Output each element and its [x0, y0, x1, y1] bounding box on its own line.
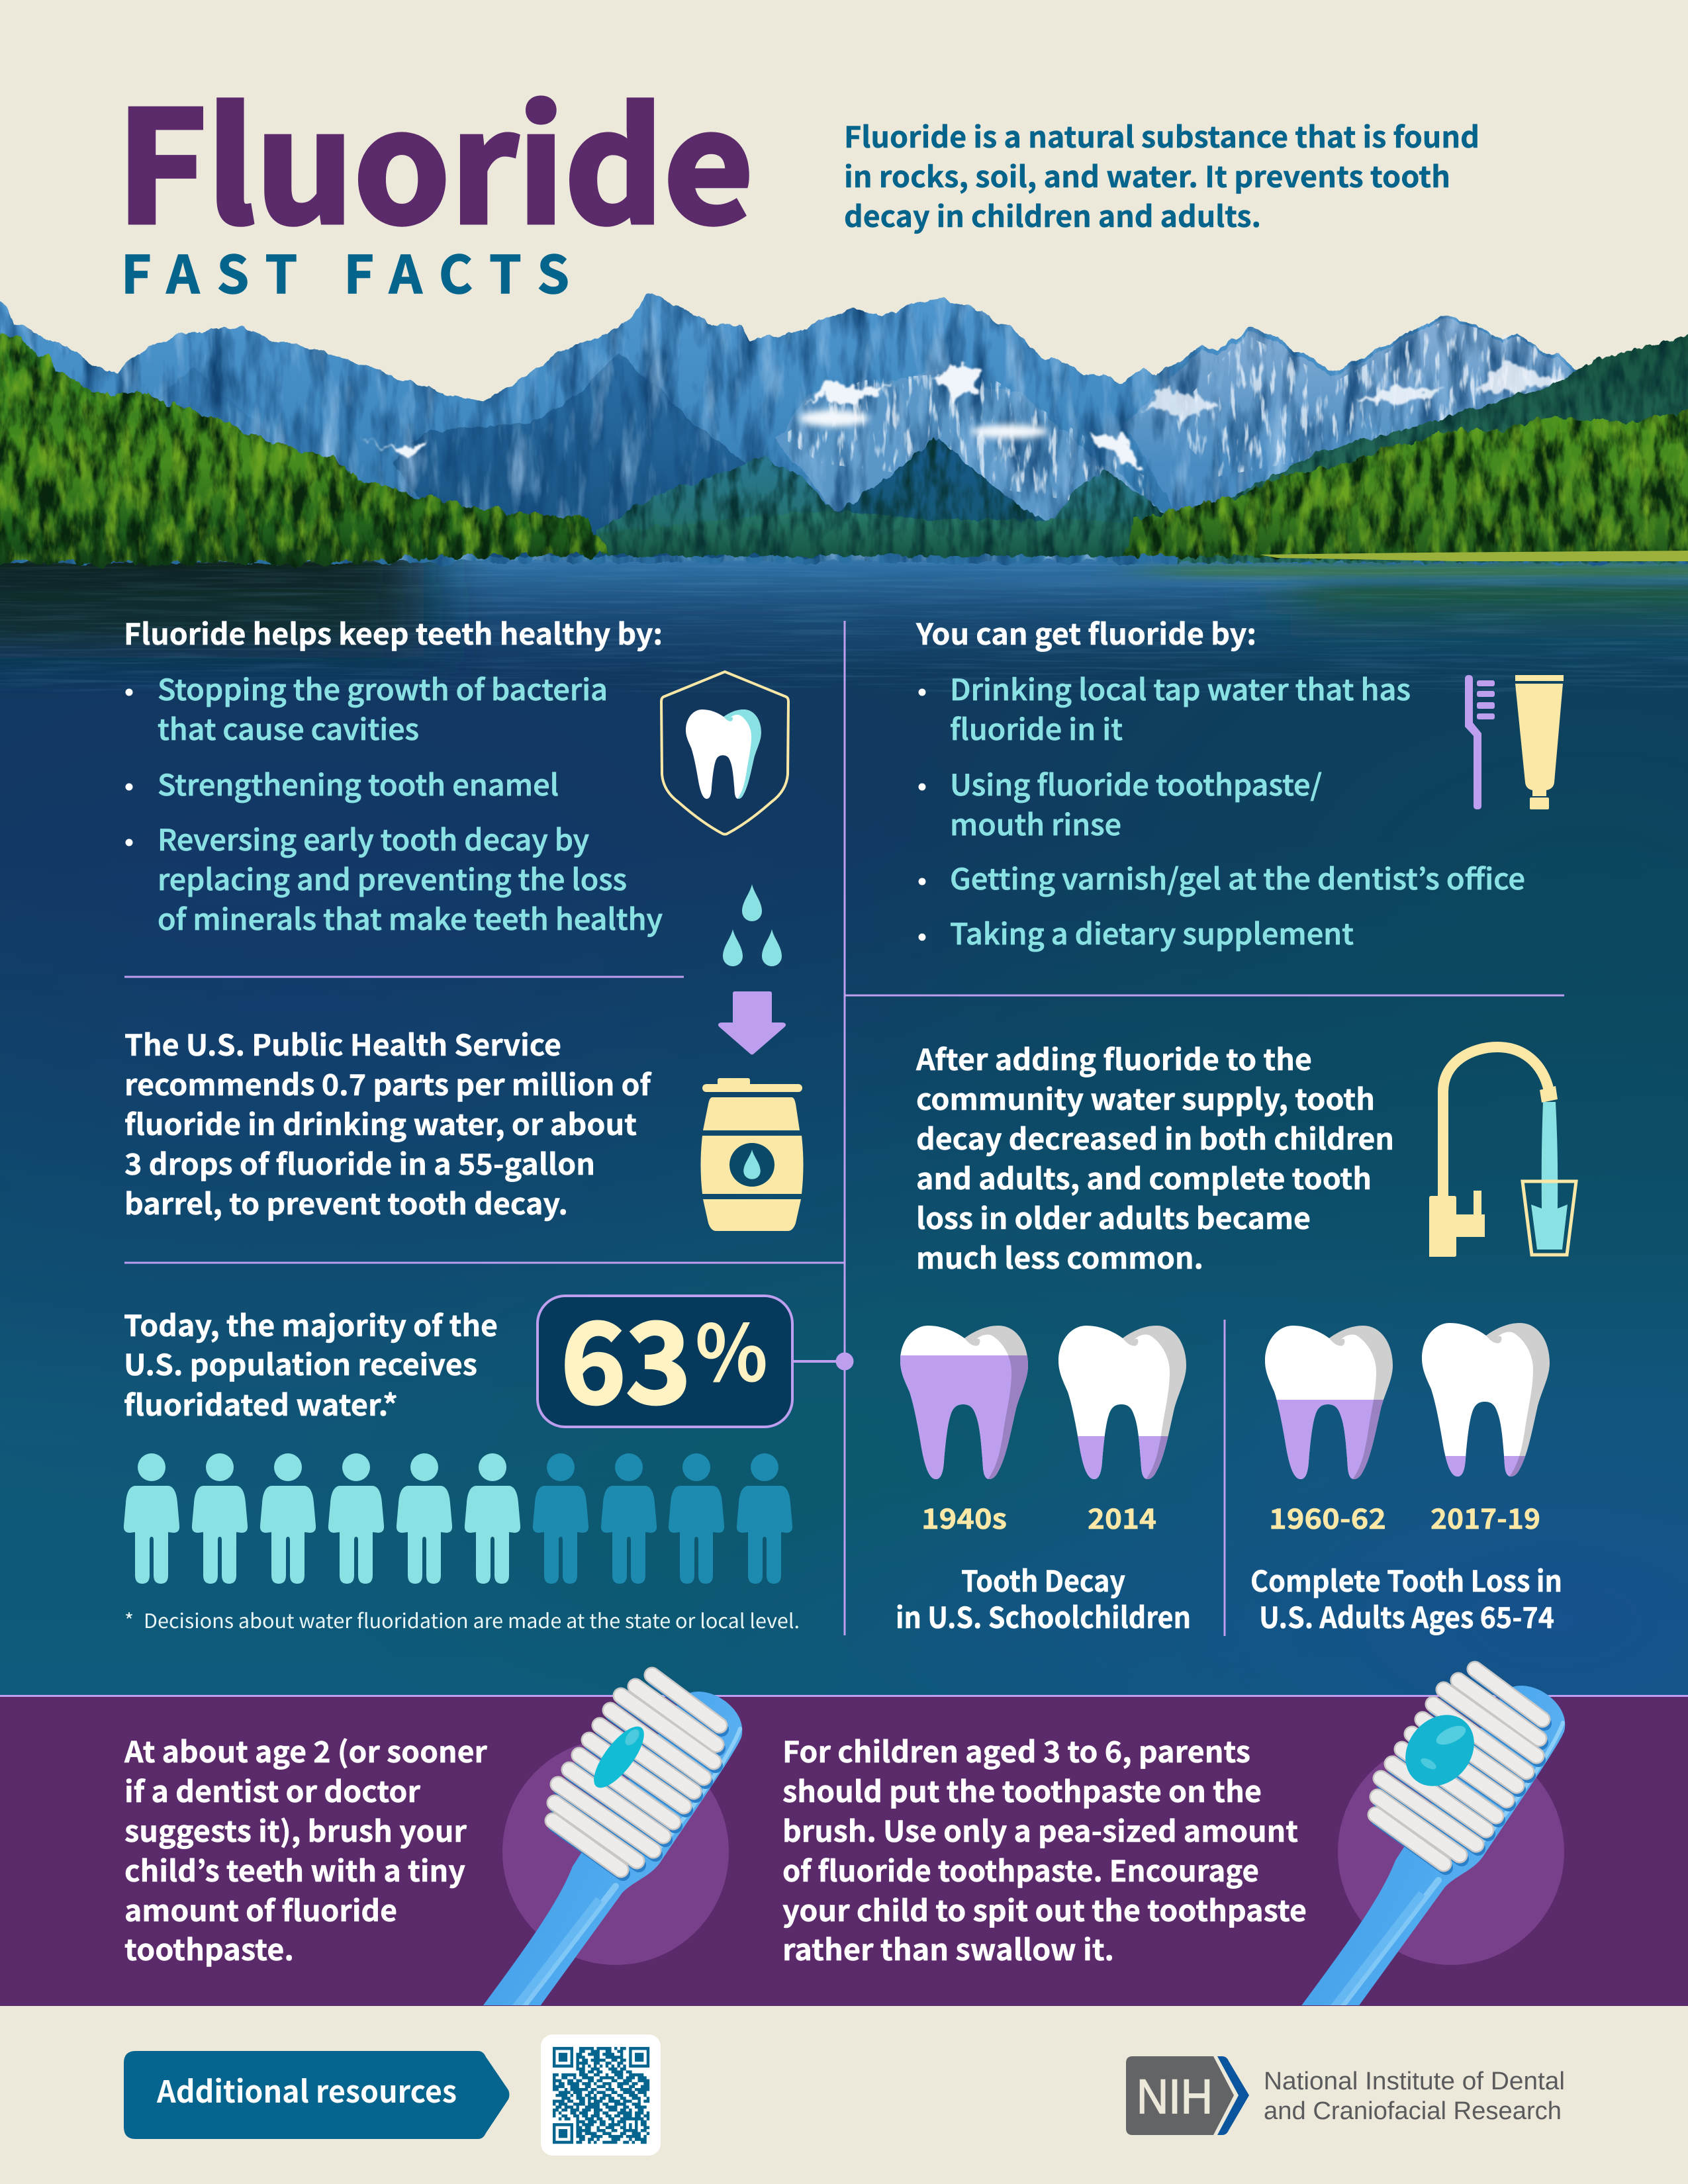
year labels [1269, 1497, 1540, 1537]
left forest [0, 334, 608, 563]
landscape: mountains and forest [0, 291, 1688, 563]
year labels: 2017-19 [1430, 1497, 1540, 1537]
text: ages 3 to 6 guidance: brush. Use only a pea-sized amount [782, 1808, 1298, 1850]
text: ages 3 to 6 guidance: For children aged 3 to 6, parents [782, 1729, 1250, 1771]
intro text [844, 114, 1479, 236]
footnote: * [124, 1605, 134, 1634]
illustration: toothbrush with pea-sized paste [1291, 1669, 1565, 2019]
text block: after adding fluoride [915, 1036, 1394, 1277]
text block: majority receives fluoridated water: Today, the majority of the [124, 1302, 498, 1345]
text block: fluoride helps keep teeth healthy: replacing and preventing the loss [158, 856, 627, 899]
button: additional resources: Additional resources [156, 2068, 457, 2112]
text: age 2 guidance: child’s teeth with a tiny [124, 1848, 465, 1890]
foreground hills [781, 437, 1086, 549]
icon: faucet and glass [1429, 1047, 1576, 1257]
text block: after adding fluoride: After adding fluoride to the [915, 1036, 1312, 1079]
left inner peak [152, 366, 404, 549]
organization name [1264, 2068, 1565, 2125]
callout: 63 percent: % [695, 1291, 768, 1404]
text block: majority receives fluoridated water: U.S. population receives [124, 1342, 477, 1384]
callout: 63 percent: 63 [561, 1275, 691, 1435]
rock streaks [781, 321, 1579, 510]
icon: water drops [723, 884, 782, 966]
logo: NIH [1126, 2056, 1249, 2135]
text: age 2 guidance: if a dentist or doctor [124, 1768, 421, 1811]
text: ages 3 to 6 guidance: should put the toothpaste on the [782, 1768, 1262, 1811]
section divider lines [124, 621, 1564, 1635]
text: age 2 guidance [124, 1729, 488, 1969]
text block: public health recommendation: The U.S. Public Health Service [124, 1022, 561, 1064]
arrow: down [718, 991, 786, 1055]
QR code [541, 2034, 661, 2156]
centre rocky face [774, 371, 1211, 549]
text block: fluoride helps keep teeth healthy: that cause cavities [158, 706, 419, 749]
caption [1250, 1558, 1562, 1637]
caption: Complete Tooth Loss in [1250, 1558, 1562, 1600]
text: age 2 guidance: amount of fluoride [124, 1888, 397, 1930]
organization name: National Institute of Dental [1264, 2068, 1565, 2095]
snow patches [355, 361, 1569, 470]
chart: complete tooth loss in adults [1250, 1320, 1562, 1637]
text block: majority receives fluoridated water [124, 1302, 498, 1424]
text block: after adding fluoride: much less common. [916, 1235, 1203, 1277]
tooth 2014 [1058, 1326, 1186, 1479]
text block: you can get fluoride: Getting varnish/gel at the dentist’s office [950, 856, 1525, 898]
subtitle: FAST FACTS [121, 234, 569, 308]
text block: after adding fluoride: and adults, and complete tooth [916, 1156, 1372, 1198]
shoreline grass [1259, 551, 1688, 561]
caption: Tooth Decay [961, 1558, 1125, 1600]
caption [896, 1558, 1191, 1637]
callout: 63 percent [538, 1275, 792, 1435]
text block: you can get fluoride [915, 611, 1525, 953]
text: ages 3 to 6 guidance: your child to spit out the toothpaste [782, 1888, 1307, 1930]
year labels: 1960-62 [1269, 1497, 1386, 1537]
tooth 1940s [900, 1326, 1028, 1479]
text block: public health recommendation [124, 1022, 652, 1223]
valley floor [599, 510, 1139, 556]
logo: NIH: NIH [1137, 2070, 1213, 2124]
footnote: Decisions about water fluoridation are made at the state or local level. [144, 1605, 800, 1634]
text block: public health recommendation: barrel, to prevent tooth decay. [124, 1181, 568, 1223]
text: age 2 guidance: toothpaste. [124, 1927, 294, 1969]
title: Fluoride [117, 44, 753, 267]
text block: after adding fluoride: community water supply, tooth [916, 1076, 1375, 1118]
text: age 2 guidance: At about age 2 (or sooner [124, 1729, 488, 1771]
text: ages 3 to 6 guidance: rather than swallow it. [782, 1927, 1114, 1969]
text block: fluoride helps keep teeth healthy [124, 611, 663, 938]
panel: children brushing guidance [0, 1695, 1688, 2006]
central dark mountain [393, 354, 854, 556]
connector with dot [792, 1353, 854, 1370]
year labels [921, 1497, 1156, 1537]
pictogram: ten people, six filled [124, 1453, 792, 1584]
text: ages 3 to 6 guidance: of fluoride toothpaste. Encourage [782, 1848, 1259, 1890]
year labels: 2014 [1088, 1497, 1156, 1537]
button: additional resources [124, 2051, 510, 2139]
distant right forest [1178, 331, 1688, 563]
tooth 2017-19 [1419, 1320, 1558, 1482]
text block: public health recommendation: recommends 0.7 parts per million of [124, 1062, 652, 1104]
icon: barrel [700, 1078, 804, 1231]
text block: after adding fluoride: loss in older adults became [916, 1195, 1311, 1238]
text block: you can get fluoride: fluoride in it [950, 706, 1123, 749]
text block: public health recommendation: 3 drops of fluoride in a 55-gallon [124, 1141, 595, 1183]
text block: you can get fluoride: Taking a dietary supplement [950, 911, 1354, 953]
text block: fluoride helps keep teeth healthy: Reversing early tooth decay by [158, 817, 589, 859]
intro text: decay in children and adults. [844, 193, 1261, 236]
text block: you can get fluoride: mouth rinse [950, 801, 1121, 844]
intro text: in rocks, soil, and water. It prevents tooth [844, 154, 1450, 196]
chart: tooth decay in schoolchildren [896, 1322, 1194, 1637]
caption: in U.S. Schoolchildren [896, 1594, 1191, 1637]
icon: toothbrush and toothpaste tube [1465, 675, 1564, 809]
text block: fluoride helps keep teeth healthy: Strengthening tooth enamel [158, 762, 559, 804]
caption: U.S. Adults Ages 65-74 [1259, 1594, 1554, 1637]
right rocky peaks [1125, 319, 1579, 543]
organization name: and Craniofacial Research [1264, 2097, 1562, 2125]
illustration: toothbrush with smear of paste [469, 1675, 742, 2025]
text block: fluoride helps keep teeth healthy: Fluoride helps keep teeth healthy by: [124, 611, 663, 653]
text block: fluoride helps keep teeth healthy: Stopping the growth of bacteria [158, 666, 608, 709]
text block: you can get fluoride: Using fluoride toothpaste/ [950, 762, 1322, 804]
icon: tooth in shield [661, 672, 788, 834]
intro text: Fluoride is a natural substance that is found [844, 114, 1479, 156]
text: age 2 guidance: suggests it), brush your [124, 1808, 467, 1850]
tooth 1960-62 [1262, 1322, 1401, 1486]
panel: water background [0, 430, 1688, 1952]
right forest [1124, 408, 1688, 557]
text block: after adding fluoride: decay decreased in both children [916, 1116, 1394, 1158]
text block: you can get fluoride: Drinking local tap water that has [950, 666, 1411, 709]
text block: public health recommendation: fluoride in drinking water, or about [124, 1101, 637, 1144]
text block: majority receives fluoridated water: fluoridated water.* [124, 1382, 398, 1424]
year labels: 1940s [921, 1497, 1007, 1537]
clouds [800, 410, 1048, 439]
text: ages 3 to 6 guidance [782, 1729, 1307, 1969]
text block: you can get fluoride: You can get fluoride by: [915, 611, 1256, 653]
text block: fluoride helps keep teeth healthy: of minerals that make teeth healthy [158, 896, 663, 938]
far mountain range [0, 291, 1688, 563]
